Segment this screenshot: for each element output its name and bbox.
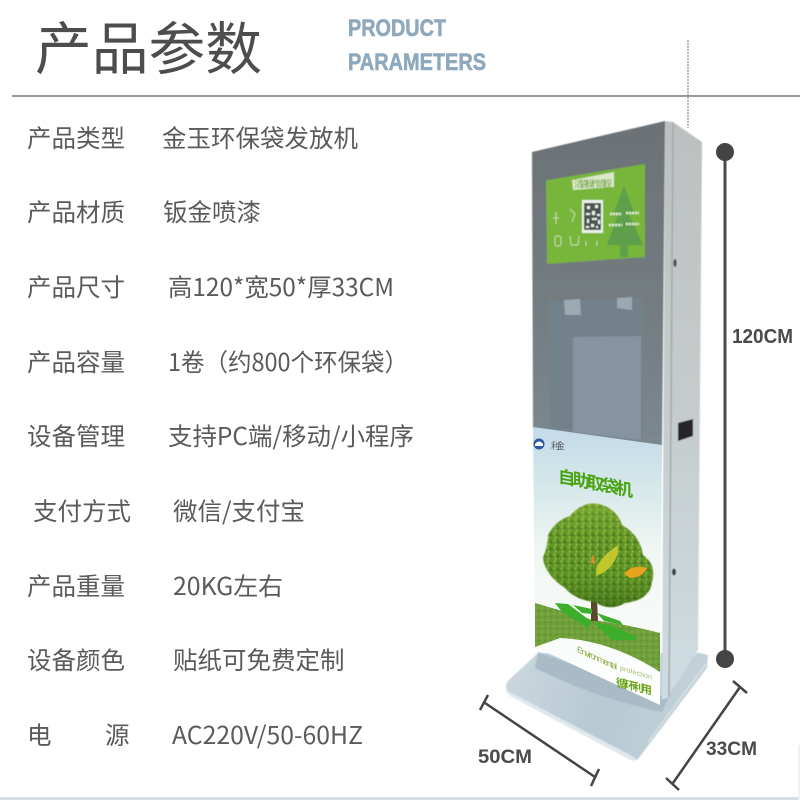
title: 产品参数 <box>35 18 262 82</box>
advertising poster <box>533 427 662 705</box>
QR code <box>582 200 603 233</box>
screen step icons <box>553 209 597 246</box>
poster logo: 利金 <box>551 440 565 451</box>
height dimension: 120CM: 120CM <box>732 326 793 348</box>
row: weight <box>27 568 283 603</box>
parameter list <box>27 120 414 752</box>
row: colour: 贴纸可免费定制 <box>173 642 344 677</box>
row: size: 产品尺寸 <box>27 269 125 304</box>
header divider <box>12 95 800 97</box>
front panel <box>532 121 665 446</box>
row: product type: 金玉环保袋发放机 <box>162 120 358 155</box>
width dimension: 50CM: 50CM <box>478 747 532 768</box>
row: power: 源 <box>105 717 130 752</box>
row: material: 产品材质 <box>27 194 125 229</box>
row: device management <box>27 418 414 453</box>
screen title <box>572 172 614 190</box>
row: weight: 20KG左右 <box>173 568 283 603</box>
poster slogan <box>577 644 652 698</box>
row: size <box>27 269 394 304</box>
subtitle: product parameters: PARAMETERS <box>348 49 486 76</box>
poster background <box>533 427 662 705</box>
poster logo <box>534 438 565 451</box>
machine base <box>506 652 708 760</box>
bag recess <box>549 297 643 441</box>
row: colour: 设备颜色 <box>27 642 125 677</box>
row: size: 高120*宽50*厚33CM <box>168 269 394 304</box>
height dimension: 120CM <box>716 143 793 668</box>
depth dimension: 33CM: 33CM <box>706 739 757 760</box>
page frame edges <box>0 745 800 800</box>
green instruction screen: 沽袋操作流程 <box>574 178 612 189</box>
row: capacity: 1卷（约800个环保袋） <box>168 344 408 379</box>
width dimension: 50CM <box>478 695 599 786</box>
row: payment <box>33 493 305 528</box>
bag clips <box>564 299 581 315</box>
poster grass <box>535 603 660 672</box>
row: power: 电 <box>27 717 52 752</box>
row: product type <box>27 120 358 155</box>
poster slogan: Environmental <box>577 644 617 673</box>
poster heading: 自助取袋机 <box>558 466 634 501</box>
row: payment: 微信/支付宝 <box>173 493 305 528</box>
row: product type: 产品类型 <box>27 120 125 155</box>
icon: lock hole <box>674 259 676 267</box>
green instruction screen <box>546 164 645 264</box>
depth dimension: 33CM <box>666 681 757 790</box>
row: weight: 产品重量 <box>27 568 125 603</box>
side seam <box>669 123 673 697</box>
row: device management: 支持PC端/移动/小程序 <box>168 418 414 453</box>
icon: bag slot <box>678 419 693 441</box>
machine body <box>532 121 702 700</box>
icon: side screw <box>672 568 676 576</box>
poster slogan: protection <box>620 664 652 682</box>
subtitle: product parameters: PRODUCT <box>348 15 446 42</box>
row: material: 钣金喷漆 <box>163 194 261 229</box>
row: power <box>27 717 363 752</box>
subtitle: product parameters <box>348 15 486 76</box>
row: capacity: 产品容量 <box>27 344 125 379</box>
tree leaves <box>588 545 626 576</box>
row: material <box>27 194 261 229</box>
side panel <box>662 121 702 700</box>
illustration: recycling arrows <box>555 603 637 640</box>
row: capacity <box>27 344 408 379</box>
icon: tree on screen <box>607 186 643 257</box>
poster slogan: 循环利用 <box>616 675 652 698</box>
row: device management: 设备管理 <box>27 418 125 453</box>
illustration: tree <box>543 504 653 621</box>
screen side text <box>609 213 639 225</box>
row: payment: 支付方式 <box>33 493 131 528</box>
row: colour <box>27 642 344 677</box>
row: power: AC220V/50-60HZ <box>172 717 363 752</box>
icon: antenna <box>687 40 689 128</box>
